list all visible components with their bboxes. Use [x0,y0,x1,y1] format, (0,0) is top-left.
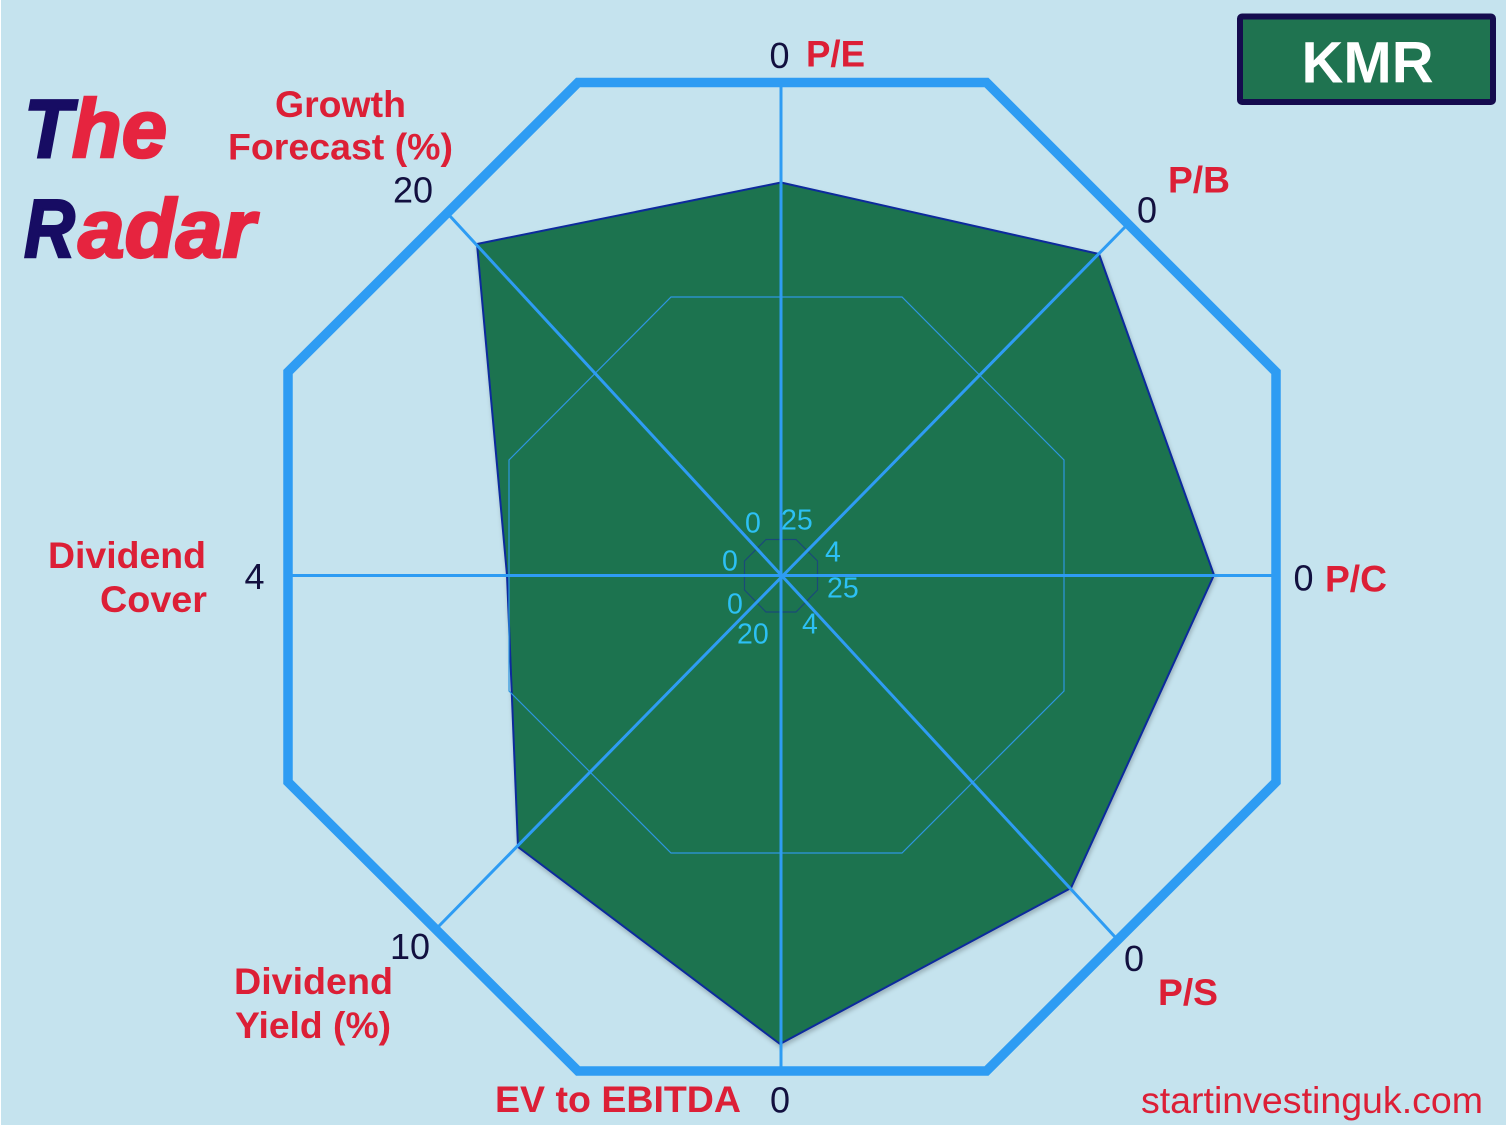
axis label: Dividend Cover: Cover [100,578,207,620]
title: The Radar: adar [78,182,260,275]
inner scale values: 25 [827,572,859,604]
axis label: P/S: P/S [1158,971,1218,1013]
inner scale values: 0 [727,588,743,620]
axis label: Dividend Yield [234,960,393,1046]
outer scale values: 4 [244,556,265,597]
axis label: Dividend Yield: Dividend [234,960,393,1002]
axis label: Growth Forecast [228,83,453,168]
ticker badge: KMR: KMR [1302,30,1434,96]
axis label: P/B: P/B [1168,158,1230,200]
axis label: P/C: P/C [1325,558,1387,600]
outer scale values [244,35,1314,1120]
ticker badge: KMR [1240,16,1493,102]
inner scale values: 20 [737,618,769,650]
outer octagon frame [288,82,1276,1071]
data polygon: KMR scores [477,182,1214,1044]
title: The Radar [24,82,260,275]
axis label: EV to EBITDA: EV to EBITDA [495,1078,741,1120]
source url: startinvestinguk.com [1141,1080,1483,1121]
outer scale values: 0 [770,35,790,76]
outer scale values: 0 [1137,190,1157,230]
inner scale values: 0 [745,508,761,540]
inner reference octagon [744,540,818,612]
inner scale values: 25 [781,504,813,536]
title: The Radar: R [24,182,75,275]
axis label: P/E: P/E [806,32,865,74]
radar axes [290,85,1274,1068]
axis label: Dividend Yield: Yield (%) [235,1004,391,1046]
outer scale values: 10 [390,926,430,967]
inner scale values [722,504,859,650]
outer scale values: 0 [770,1080,790,1120]
outer scale values: 20 [393,170,433,210]
axis label: Growth Forecast: Forecast (%) [228,126,453,168]
outer scale values: 0 [1124,938,1144,979]
title: The Radar: he [72,82,167,175]
outer scale values: 0 [1294,558,1314,598]
inner scale values: 0 [722,546,738,578]
inner scale values: 4 [802,608,818,640]
inner scale values: 4 [825,536,841,568]
axis label: Dividend Cover: Dividend [48,534,206,576]
axis label: Growth Forecast: Growth [275,83,406,125]
title: The Radar: T [24,82,78,175]
axis label: Dividend Cover [48,534,207,620]
middle reference octagon [509,297,1064,853]
